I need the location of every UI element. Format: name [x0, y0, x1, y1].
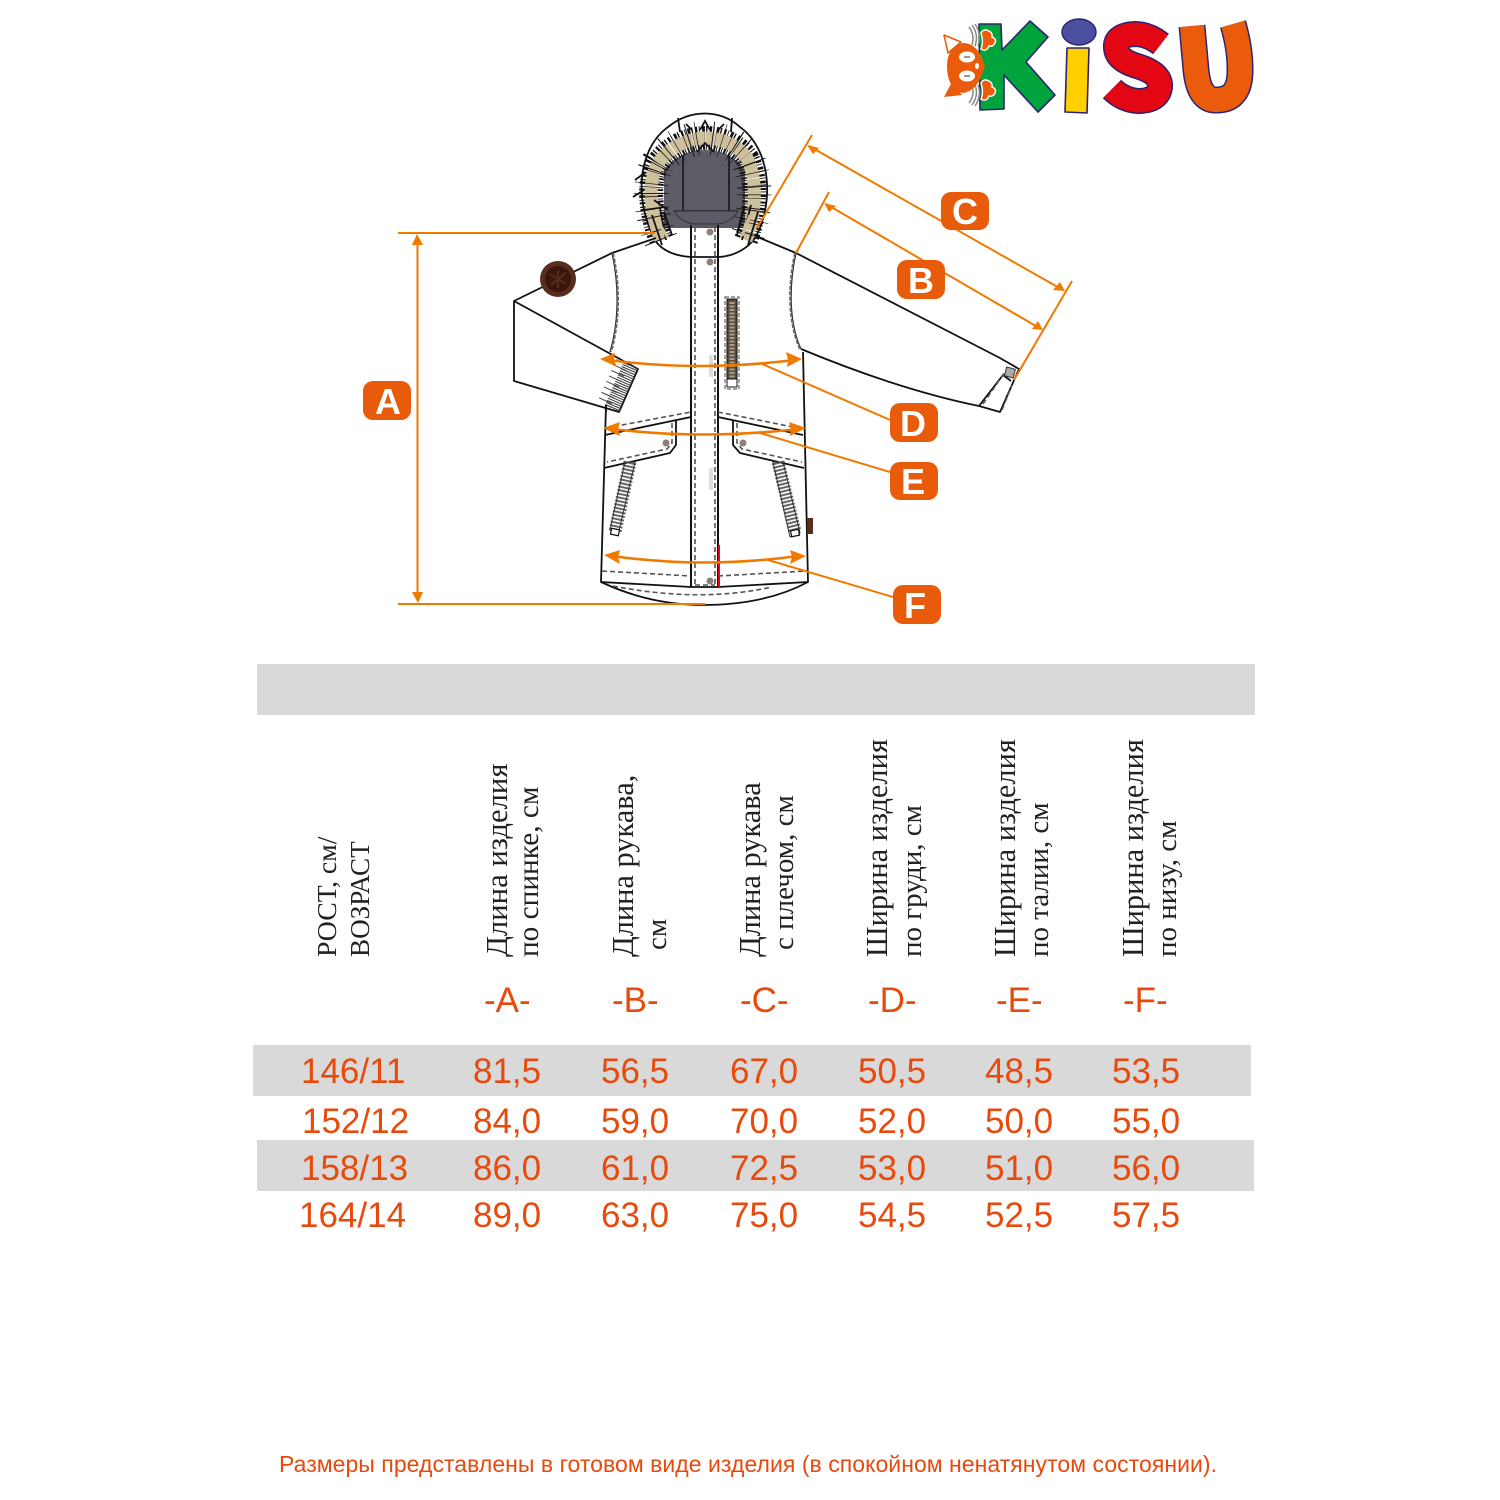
diagram: jacket with measurements	[363, 114, 1072, 626]
table row 164/14: 54,5	[858, 1196, 926, 1235]
table column letters: -C-	[740, 981, 789, 1020]
heading: A	[480, 764, 545, 957]
heading: D: Ширина изделия	[860, 739, 894, 957]
table row 152/12: 70,0	[730, 1102, 798, 1141]
table column letters: -F-	[1123, 981, 1168, 1020]
fur trim	[633, 121, 758, 245]
table row 158/13: 72,5	[730, 1149, 798, 1188]
table row 152/12: 55,0	[1112, 1102, 1180, 1141]
label F: F	[904, 585, 926, 626]
letter K	[979, 21, 1055, 112]
measure D: chest width	[600, 352, 890, 420]
measure A: back length	[398, 233, 705, 604]
table row 152/12	[302, 1102, 1180, 1141]
heading: C: Длина рукава	[733, 782, 767, 957]
heading: E: Ширина изделия	[988, 739, 1022, 957]
letter U	[1192, 24, 1240, 100]
heading: B: см	[641, 919, 673, 950]
heading: A: Длина изделия	[480, 764, 514, 957]
table row 164/14	[299, 1196, 1180, 1235]
lower zip pockets	[610, 462, 800, 537]
left sleeve	[514, 238, 656, 412]
heading: F: по низу, см	[1151, 821, 1183, 957]
table row 146/11: 56,5	[601, 1052, 669, 1091]
table row 158/13: 61,0	[601, 1149, 669, 1188]
buttons	[662, 228, 746, 584]
measure B: sleeve length	[796, 192, 1072, 380]
table row 152/12: 52,0	[858, 1102, 926, 1141]
table column letters: -B-	[612, 981, 659, 1020]
heading: height/age: РОСТ, см/	[312, 836, 343, 957]
heading: F	[1116, 739, 1183, 957]
table row 146/11: 146/11	[301, 1052, 405, 1091]
footnote: Размеры представлены в готовом виде изделия (в спокойном ненатянутом состоянии).	[279, 1451, 1217, 1477]
icon: fox paws	[981, 30, 996, 100]
heading: C: с плечом, см	[768, 795, 800, 950]
label F	[893, 585, 941, 626]
hood lining	[664, 150, 745, 228]
armholes	[610, 253, 801, 352]
table row 146/11: 53,5	[1112, 1052, 1180, 1091]
logo: KISU	[944, 19, 1240, 113]
label B: B	[908, 260, 934, 301]
sleeve badge	[540, 261, 576, 297]
side tag	[807, 518, 813, 534]
table row 164/14: 63,0	[601, 1196, 669, 1235]
table header band	[257, 664, 1255, 715]
table row stripe 3	[257, 1140, 1254, 1191]
table row stripe 1	[253, 1045, 1251, 1096]
pocket flaps	[604, 412, 804, 468]
heading: A: по спинке, см	[513, 787, 545, 957]
table row 158/13: 86,0	[473, 1149, 541, 1188]
table row 164/14: 164/14	[299, 1196, 406, 1235]
jacket drawing	[514, 114, 1019, 605]
chest zip pocket	[725, 297, 739, 389]
table column letters: -E-	[996, 981, 1043, 1020]
body	[601, 352, 808, 605]
table column headings	[312, 739, 1183, 957]
table row 152/12: 152/12	[302, 1102, 409, 1141]
heading: height/age: ВОЗРАСТ	[345, 841, 375, 957]
table row 146/11: 81,5	[473, 1052, 541, 1091]
table row 152/12: 84,0	[473, 1102, 541, 1141]
table row 146/11: 67,0	[730, 1052, 798, 1091]
label E: E	[901, 461, 925, 502]
icon: fox mascot	[944, 24, 985, 106]
letter S	[1112, 34, 1161, 101]
label C	[941, 191, 989, 232]
label A: A	[375, 381, 401, 422]
table row 164/14: 89,0	[473, 1196, 541, 1235]
heading: E: по талии, см	[1023, 802, 1055, 957]
letter I	[1062, 19, 1096, 113]
right sleeve	[755, 236, 1019, 412]
table row 158/13	[301, 1149, 1180, 1188]
table row 152/12: 59,0	[601, 1102, 669, 1141]
label B	[897, 260, 945, 301]
table row 146/11: 50,5	[858, 1052, 926, 1091]
table row 164/14: 57,5	[1112, 1196, 1180, 1235]
label D	[890, 403, 938, 444]
heading: height/age	[312, 836, 375, 957]
table row 158/13: 56,0	[1112, 1149, 1180, 1188]
placket	[691, 225, 719, 587]
table row 146/11	[301, 1052, 1180, 1091]
table row 158/13: 53,0	[858, 1149, 926, 1188]
heading: C	[733, 782, 800, 957]
table column letters: -A-	[484, 981, 531, 1020]
measure E: waist width	[603, 422, 890, 472]
heading: D: по груди, см	[896, 805, 928, 957]
table column letters	[484, 981, 1168, 1020]
label C: C	[952, 191, 978, 232]
table row 152/12: 50,0	[985, 1102, 1053, 1141]
table row 164/14: 75,0	[730, 1196, 798, 1235]
table row 146/11: 48,5	[985, 1052, 1053, 1091]
hood	[633, 114, 767, 257]
heading: B	[606, 775, 673, 957]
heading: F: Ширина изделия	[1116, 739, 1150, 957]
label E	[890, 461, 938, 502]
table column letters: -D-	[868, 981, 917, 1020]
measure F: hem width	[604, 550, 893, 597]
label D: D	[900, 403, 926, 444]
heading: D	[860, 739, 928, 957]
table row 164/14: 52,5	[985, 1196, 1053, 1235]
heading: E	[988, 739, 1055, 957]
table row 158/13: 51,0	[985, 1149, 1053, 1188]
heading: B: Длина рукава,	[606, 775, 640, 957]
label A	[363, 381, 411, 422]
table row 158/13: 158/13	[301, 1149, 408, 1188]
measure C: sleeve with shoulder	[757, 135, 1065, 291]
